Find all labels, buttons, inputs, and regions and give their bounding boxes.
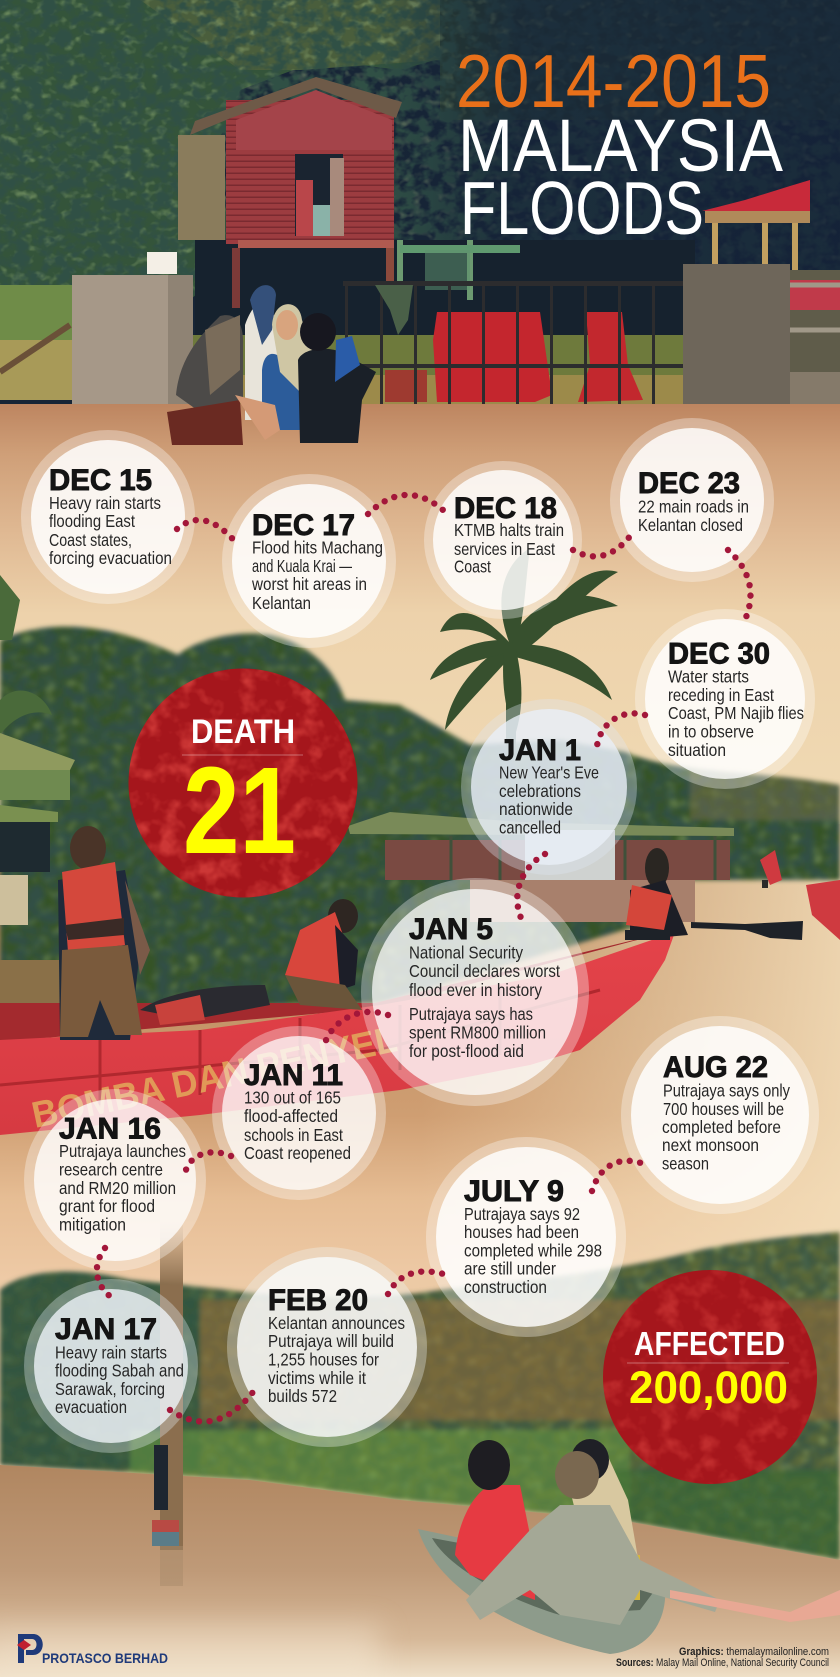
description: dec 17: and Kuala Krai — — [252, 556, 352, 576]
logo: Protasco Berhad — [17, 1634, 168, 1666]
description: dec 17: worst hit areas in — [251, 574, 367, 594]
photo: rescue boat — [0, 930, 675, 1136]
boat lettering: BOMBA DAN PENYEL — [28, 1018, 401, 1136]
photo: people in rowing boat — [418, 1439, 840, 1654]
description: jan 11: flood-affected — [244, 1106, 338, 1126]
gate fence — [343, 281, 683, 404]
description: dec 17: Kelantan — [252, 593, 311, 613]
description: aug 22 — [662, 1080, 790, 1174]
photo: hillside bushes — [0, 1230, 840, 1570]
description: dec 15 — [49, 493, 172, 568]
description: jan 5 — [409, 942, 560, 1061]
connector: dec 30 to jan 1 — [597, 713, 645, 746]
description: july 9: completed while 298 — [464, 1240, 602, 1260]
connector: dec 23 to dec 30 — [728, 550, 750, 624]
connector: dec 15 to dec 17 — [177, 520, 238, 545]
description: aug 22: Putrajaya says only — [663, 1080, 790, 1100]
description: jan 17: flooding Sabah and — [55, 1360, 184, 1380]
description: dec 23: 22 main roads in — [638, 496, 749, 516]
date: jan 16: JAN 16 — [59, 1112, 161, 1146]
description: july 9: construction — [464, 1277, 547, 1297]
left palm — [0, 575, 52, 735]
stat: death toll: 21 — [183, 743, 296, 880]
panel: aug 22 — [621, 1016, 819, 1214]
gate pillars — [72, 275, 168, 404]
connector: jan 1 to jan 5 — [517, 854, 545, 918]
description: jan 11: 130 out of 165 — [244, 1088, 341, 1108]
description: dec 15: Coast states, — [49, 530, 132, 550]
description: feb 20: Putrajaya will build — [268, 1331, 394, 1351]
credits — [616, 1646, 829, 1669]
description: jan 17: Sarawak, forcing — [55, 1379, 165, 1399]
date: jan 1: JAN 1 — [499, 734, 581, 767]
panel: feb 20 — [227, 1247, 427, 1447]
photo: firefighter seated — [140, 899, 362, 1025]
description: dec 30: receding in East — [668, 685, 774, 705]
panel: dec 15 — [21, 430, 195, 604]
long building — [348, 812, 734, 836]
date: dec 17: DEC 17 — [252, 509, 355, 542]
description: feb 20: builds 572 — [268, 1386, 337, 1406]
description: dec 30: in to observe — [668, 722, 754, 742]
description: jan 5: flood ever in history — [409, 980, 542, 1000]
description: dec 23 — [638, 496, 749, 535]
photo: water around rescue boat — [0, 870, 840, 1280]
connector: jan 11 to jan 16 — [185, 1152, 231, 1174]
photo: flood water — [0, 404, 840, 824]
photo: house in flood — [0, 0, 840, 410]
date: jan 11: JAN 11 — [244, 1059, 343, 1092]
photo: firefighter standing — [58, 826, 150, 1040]
connector: jan 5 to jan 11 — [323, 1012, 388, 1049]
photo: water left of boat — [0, 960, 120, 1010]
description: jan 5: Putrajaya says has — [409, 1004, 533, 1024]
photo: signpost — [152, 1220, 183, 1586]
description: dec 18: services in East — [454, 539, 555, 559]
description: jan 16 — [59, 1141, 186, 1234]
description: july 9: are still under — [464, 1258, 556, 1278]
description: dec 30: Water starts — [668, 666, 749, 686]
panel: dec 23 — [610, 418, 774, 582]
description: jan 16: mitigation — [59, 1214, 126, 1234]
description: aug 22: next monsoon — [662, 1135, 759, 1155]
description: dec 23: Kelantan closed — [638, 515, 743, 535]
date: july 9: JULY 9 — [464, 1175, 564, 1208]
description: jan 5: spent RM800 million — [409, 1022, 546, 1042]
connector: feb 20 to july 9 — [388, 1271, 447, 1294]
description: jan 5: for post-flood aid — [409, 1041, 524, 1061]
description: aug 22: 700 houses will be — [663, 1099, 784, 1119]
right shed — [702, 180, 810, 211]
description: jan 16: and RM20 million — [59, 1178, 176, 1198]
house — [226, 100, 394, 244]
panel: jan 5 — [361, 878, 589, 1106]
description: jan 17: evacuation — [55, 1397, 127, 1417]
description: dec 17 — [251, 538, 383, 613]
description: dec 18: Coast — [454, 556, 491, 576]
description: jan 5: Council declares worst — [409, 961, 560, 981]
photo: trees and palm — [0, 548, 840, 1020]
description: feb 20 — [268, 1313, 405, 1406]
panel: jan 17 — [24, 1279, 198, 1453]
title: FLOODS — [460, 166, 704, 250]
description: jan 11: Coast reopened — [244, 1143, 351, 1163]
description: jan 11: schools in East — [244, 1125, 343, 1145]
description: aug 22: season — [662, 1154, 709, 1174]
description: jan 1 — [499, 762, 599, 838]
logo: Protasco Berhad: PROTASCO BERHAD — [42, 1650, 168, 1666]
photo: people in water — [167, 285, 376, 445]
photo: bottom water — [0, 1465, 840, 1677]
date: dec 23: DEC 23 — [638, 467, 740, 500]
description: aug 22: completed before — [662, 1117, 781, 1137]
title — [456, 39, 784, 250]
panel: dec 18 — [424, 461, 582, 619]
connector: jan 17 to feb 20 — [170, 1392, 253, 1422]
description: dec 30 — [668, 666, 804, 760]
description: feb 20: 1,255 houses for — [268, 1350, 379, 1370]
description: jan 1: celebrations — [499, 781, 581, 801]
stat: people affected: 200,000 — [629, 1362, 788, 1413]
left building — [0, 733, 75, 770]
date: feb 20: FEB 20 — [268, 1284, 368, 1317]
panel: jan 11 — [212, 1026, 386, 1200]
description: dec 30: situation — [668, 740, 726, 760]
stat: death toll — [128, 668, 358, 898]
panel: jan 16 — [24, 1089, 206, 1271]
description: july 9 — [464, 1204, 602, 1297]
connector: jan 16 to jan 17 — [97, 1248, 111, 1297]
stat: people affected — [603, 1270, 817, 1484]
date: dec 18: DEC 18 — [454, 492, 557, 525]
description: feb 20: victims while it — [268, 1368, 366, 1388]
description: jan 1: New Year's Eve — [499, 762, 599, 782]
description: jan 5: National Security — [409, 942, 523, 962]
stat: death toll: DEATH — [191, 713, 295, 751]
date: jan 5: JAN 5 — [409, 913, 493, 946]
description: jan 11 — [244, 1088, 351, 1163]
date: aug 22: AUG 22 — [663, 1051, 768, 1084]
description: july 9: Putrajaya says 92 — [464, 1204, 580, 1224]
stat: people affected: AFFECTED — [634, 1325, 785, 1362]
date: dec 30: DEC 30 — [668, 638, 770, 670]
description: dec 15: flooding East — [49, 511, 135, 531]
photo: small figures and paddle in distance — [691, 850, 840, 940]
description: dec 17: Flood hits Machang — [252, 538, 383, 558]
description: jan 16: grant for flood — [59, 1196, 155, 1216]
description: dec 18: KTMB halts train — [454, 520, 564, 540]
description: jan 1: nationwide — [499, 799, 573, 819]
description: dec 15: forcing evacuation — [49, 548, 172, 568]
panel: july 9 — [426, 1137, 626, 1337]
description: dec 18 — [454, 520, 564, 576]
date: dec 15: DEC 15 — [49, 464, 152, 497]
red containers — [433, 312, 552, 402]
panel: jan 1 — [461, 699, 637, 875]
connector: july 9 to aug 22 — [592, 1161, 644, 1191]
date: jan 17: JAN 17 — [55, 1313, 157, 1346]
title: 2014-2015 — [456, 39, 771, 123]
connector: dec 17 to dec 18 — [368, 495, 443, 514]
description: dec 15: Heavy rain starts — [49, 493, 161, 513]
credits: Graphics: themalaymailonline.com — [679, 1646, 829, 1658]
title: MALAYSIA — [458, 104, 784, 187]
description: jan 17 — [55, 1342, 184, 1417]
description: jan 17: Heavy rain starts — [55, 1342, 167, 1362]
panel: dec 30 — [635, 609, 815, 789]
description: jan 16: Putrajaya launches — [59, 1141, 186, 1161]
description: july 9: houses had been — [464, 1222, 579, 1242]
photo: firefighter at bow — [625, 848, 688, 940]
description: jan 16: research centre — [59, 1160, 163, 1180]
description: dec 30: Coast, PM Najib flies — [668, 703, 804, 723]
description: feb 20: Kelantan announces — [268, 1313, 405, 1333]
panel: dec 17 — [222, 474, 396, 648]
description: jan 1: cancelled — [499, 818, 561, 838]
connector: dec 18 to dec 23 — [573, 535, 631, 556]
